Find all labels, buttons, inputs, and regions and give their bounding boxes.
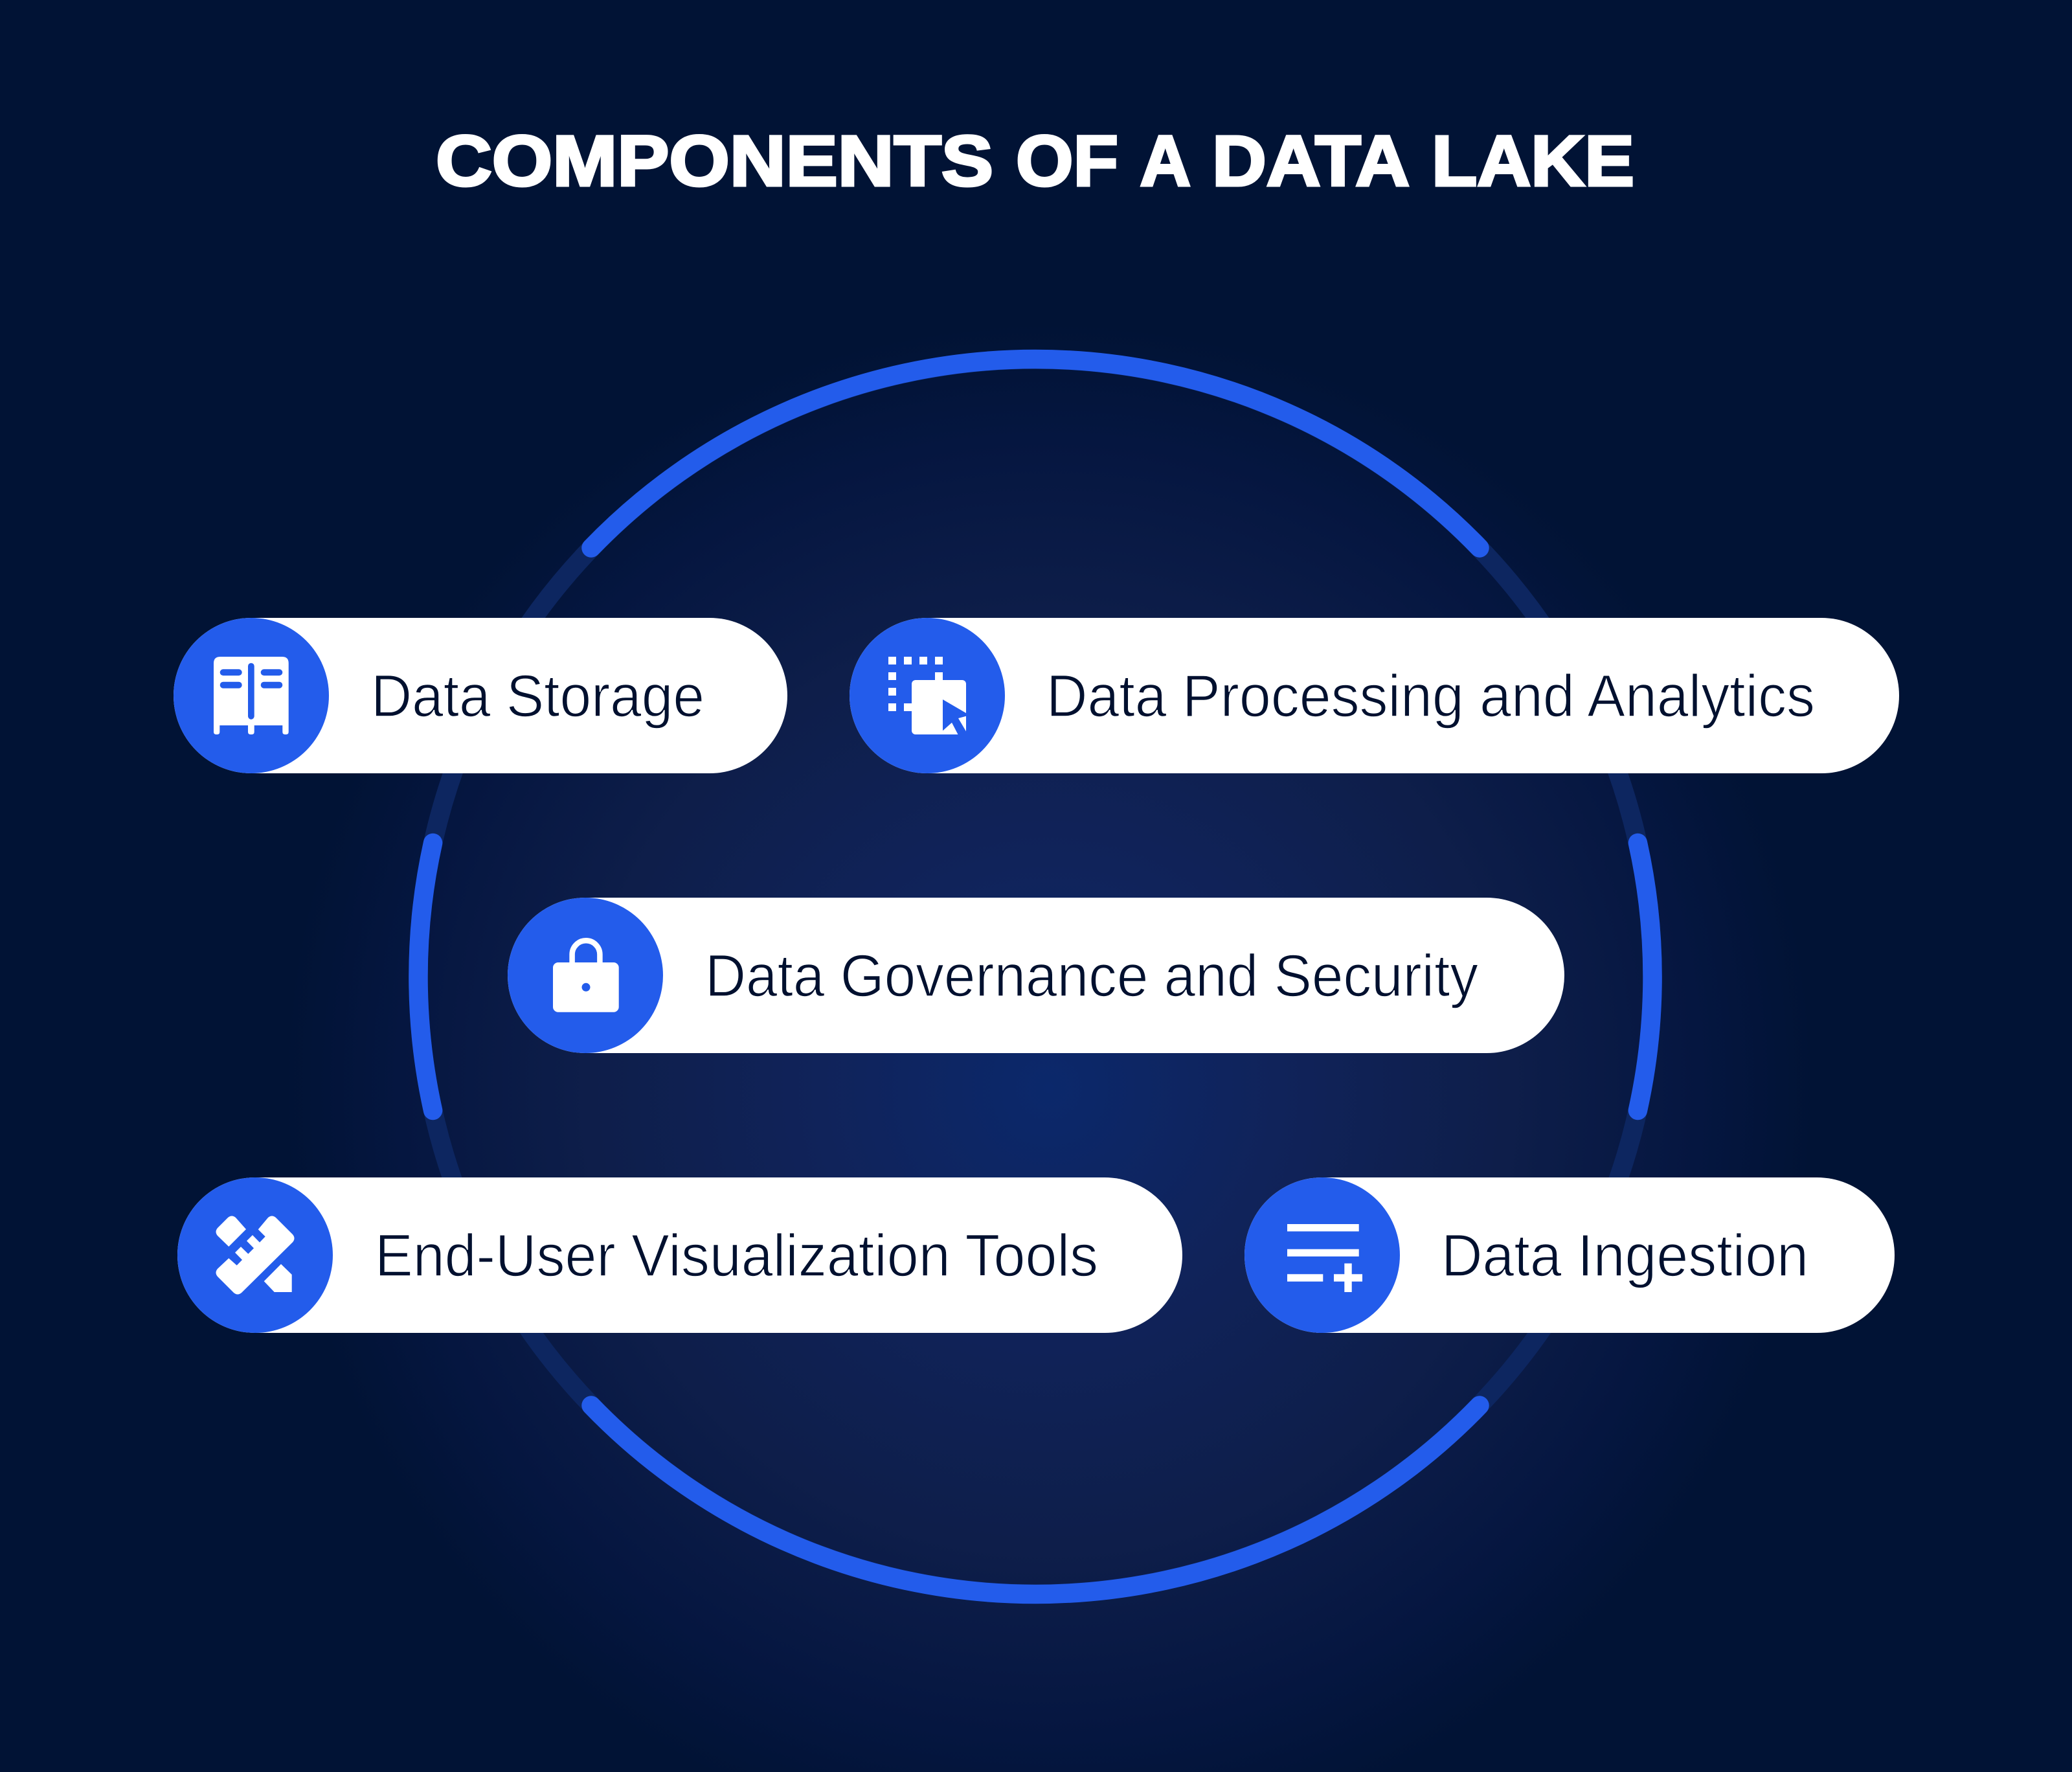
panel: data governance and security [508, 898, 1564, 1053]
pill background [850, 618, 1899, 773]
label: Data Governance and Security [705, 943, 1478, 1009]
dim base ring [418, 359, 1652, 1594]
ring diagram [418, 359, 1652, 1594]
label: Data Ingestion [1441, 1223, 1808, 1289]
icon: selection cursor [850, 618, 1005, 773]
right arc [1638, 843, 1652, 1110]
title [436, 122, 1634, 201]
icon: storage cabinet [174, 618, 329, 773]
pill background [177, 1177, 1182, 1333]
pill background [1244, 1177, 1895, 1333]
label: End-User Visualization Tools [375, 1223, 1098, 1289]
title: LAKE [1432, 122, 1634, 201]
panel: end-user visualization tools [177, 1177, 1182, 1333]
pill background [508, 898, 1564, 1053]
bottom arc [591, 1405, 1480, 1594]
pill background [174, 618, 787, 773]
title: OF [1016, 122, 1118, 201]
icon: ruler and pencil [177, 1177, 333, 1333]
label: Data Storage [371, 663, 704, 729]
title: A [1140, 122, 1191, 201]
left arc [418, 843, 433, 1110]
icon: padlock [508, 898, 663, 1053]
top arc [591, 359, 1480, 548]
panel: data storage [174, 618, 787, 773]
title: DATA [1212, 122, 1410, 201]
label: Data Processing and Analytics [1046, 663, 1815, 729]
icon: list with plus [1244, 1177, 1400, 1333]
panel: data ingestion [1244, 1177, 1895, 1333]
panel: data processing and analytics [850, 618, 1899, 773]
title: COMPONENTS [436, 122, 993, 201]
